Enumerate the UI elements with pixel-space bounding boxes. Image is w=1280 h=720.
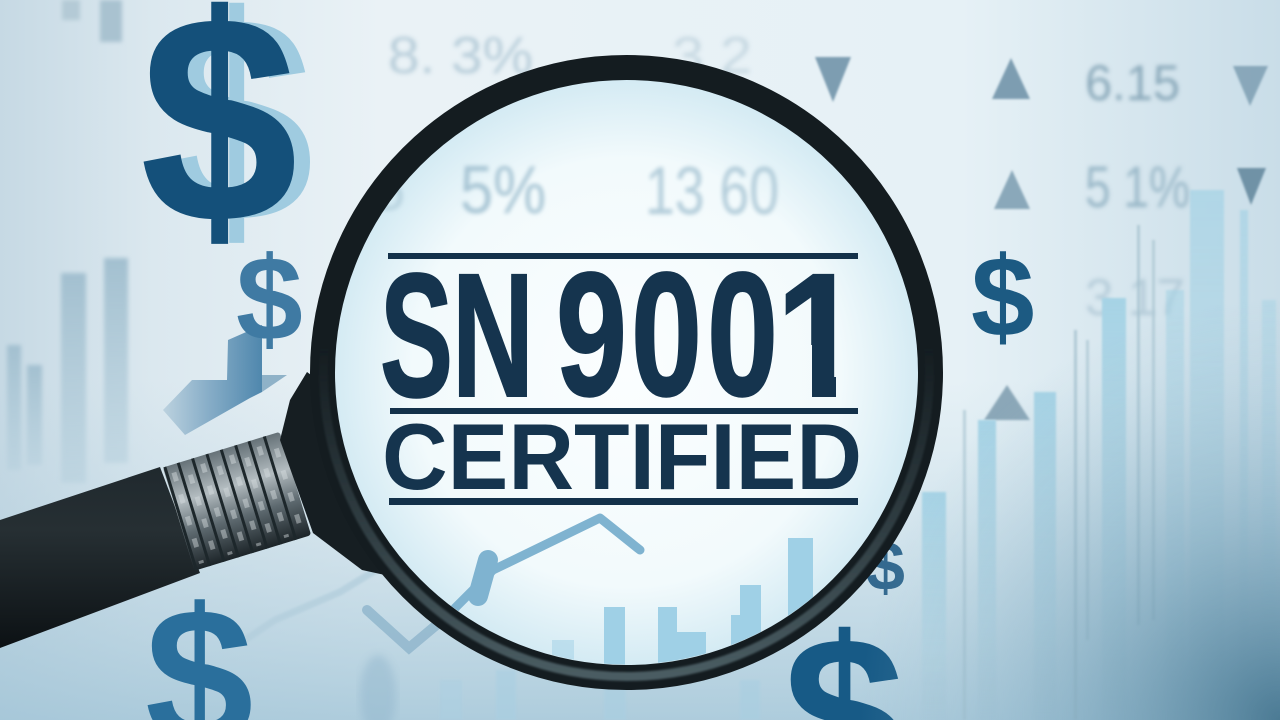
lens [322, 68, 930, 678]
arrow chart fragment left [163, 325, 287, 435]
flange [280, 372, 385, 575]
lens ring [322, 68, 930, 678]
lens figures [384, 164, 779, 217]
handle grip [0, 467, 200, 648]
trend line fragment lower left [245, 570, 376, 640]
number 9001: 0 [707, 237, 778, 433]
word certified: CERTIFIED [382, 404, 862, 509]
magnifying glass handle [0, 372, 385, 648]
lens trend line [455, 518, 640, 608]
lower trend line segment [367, 610, 440, 648]
number 9001: 0 [631, 237, 702, 433]
number 9001: 1 [776, 238, 862, 434]
ring highlight [324, 68, 930, 676]
background financial figures: 8. 3% [388, 27, 533, 85]
top rule [388, 253, 858, 259]
lens bars [552, 538, 813, 675]
lens figures: 5% [460, 152, 546, 228]
bottom rule [389, 498, 858, 505]
background bar charts left [7, 0, 128, 483]
code SN: N [452, 238, 534, 434]
number 9001 [560, 271, 836, 398]
lens figures: 5 [372, 156, 405, 223]
background triangles [815, 57, 1268, 420]
lens figures: 13 60 [645, 153, 779, 229]
blurred smudge bottom [360, 655, 396, 720]
faded content in lens [372, 152, 813, 675]
lens glass [332, 78, 920, 666]
background financial figures: 3 17 [1085, 269, 1185, 327]
background financial figures: 5 1% [1085, 155, 1190, 220]
background financial figures: 6.15 [1085, 55, 1180, 111]
faint bars below the lens [440, 670, 760, 720]
dollar sign small left: $ [236, 232, 303, 366]
dollar sign small right: $ [971, 234, 1034, 361]
background financial figures [388, 27, 1190, 327]
middle rule [390, 408, 858, 414]
certification label [380, 237, 862, 509]
background financial figures: 3 2 [672, 27, 752, 85]
number 9001: 9 [556, 237, 627, 433]
dollar sign near lens: $ [866, 527, 905, 605]
code SN: S [380, 238, 453, 434]
corner shading [860, 300, 1280, 720]
background bar charts right [922, 190, 1276, 720]
metal collar [163, 432, 311, 571]
